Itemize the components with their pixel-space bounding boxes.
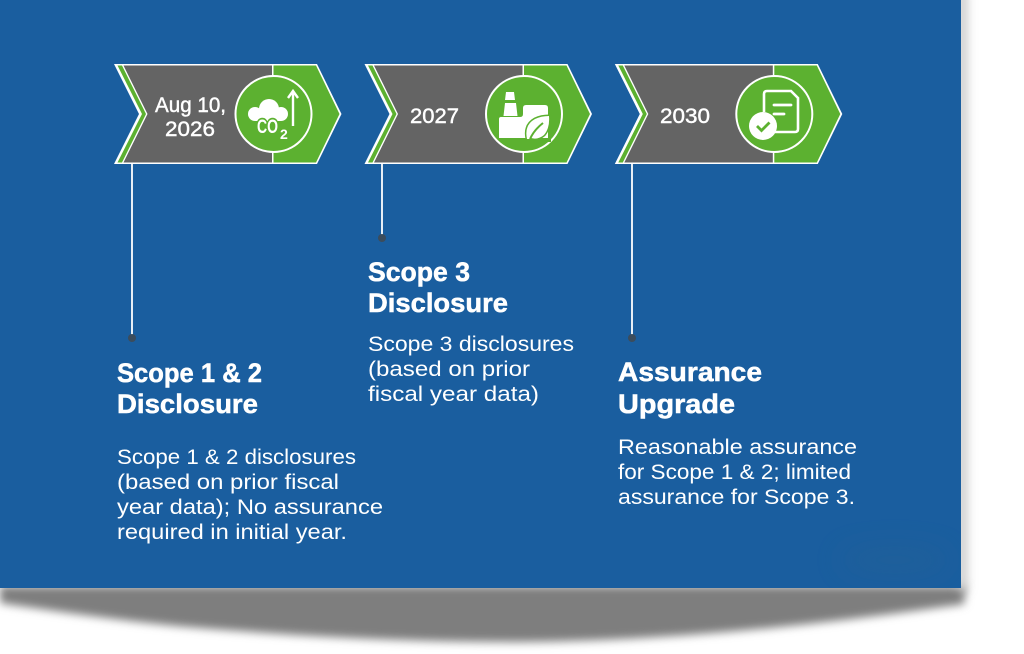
body: Scope 3 disclosures — [368, 332, 574, 356]
body: Reasonable assurance — [618, 435, 857, 459]
body: Scope 1 & 2 disclosures — [117, 445, 356, 469]
heading: Scope 1 & 2 — [117, 358, 262, 388]
date label: Aug 10, — [155, 93, 226, 117]
icon: document with check badge — [749, 91, 798, 140]
body: (based on prior fiscal — [117, 470, 339, 494]
year label: 2030 — [660, 104, 710, 128]
icon: CO2 cloud with up arrow: CO — [257, 117, 278, 138]
body: fiscal year data) — [368, 382, 539, 406]
text block: Scope 3 — [368, 257, 574, 406]
body: assurance for Scope 3. — [618, 485, 855, 509]
heading: Upgrade — [618, 389, 735, 419]
heading: Disclosure — [117, 389, 258, 419]
icon: factory with leaf — [499, 92, 551, 142]
icon: CO2 cloud with up arrow — [248, 91, 298, 142]
timeline step 1: Aug 10, 2026 — [114, 64, 342, 164]
body: (based on prior — [368, 357, 530, 381]
heading: Assurance — [618, 357, 762, 387]
connector 2 — [378, 164, 386, 242]
year label: 2027 — [410, 104, 459, 128]
timeline step 2: 2027 — [364, 64, 592, 164]
text block: Assurance Upgrade — [618, 357, 857, 509]
text block: Scope 1 & 2 — [117, 358, 383, 544]
body: required in initial year. — [117, 520, 347, 544]
heading: Scope 3 — [368, 257, 470, 287]
connector 3 — [628, 164, 636, 342]
timeline step 3: 2030 — [615, 64, 842, 164]
date label: 2026 — [165, 117, 215, 141]
heading: Disclosure — [368, 288, 508, 318]
body: for Scope 1 & 2; limited — [618, 460, 851, 484]
icon: CO2 cloud with up arrow: 2 — [280, 126, 288, 142]
connector 1 — [128, 164, 136, 342]
body: year data); No assurance — [117, 495, 383, 519]
